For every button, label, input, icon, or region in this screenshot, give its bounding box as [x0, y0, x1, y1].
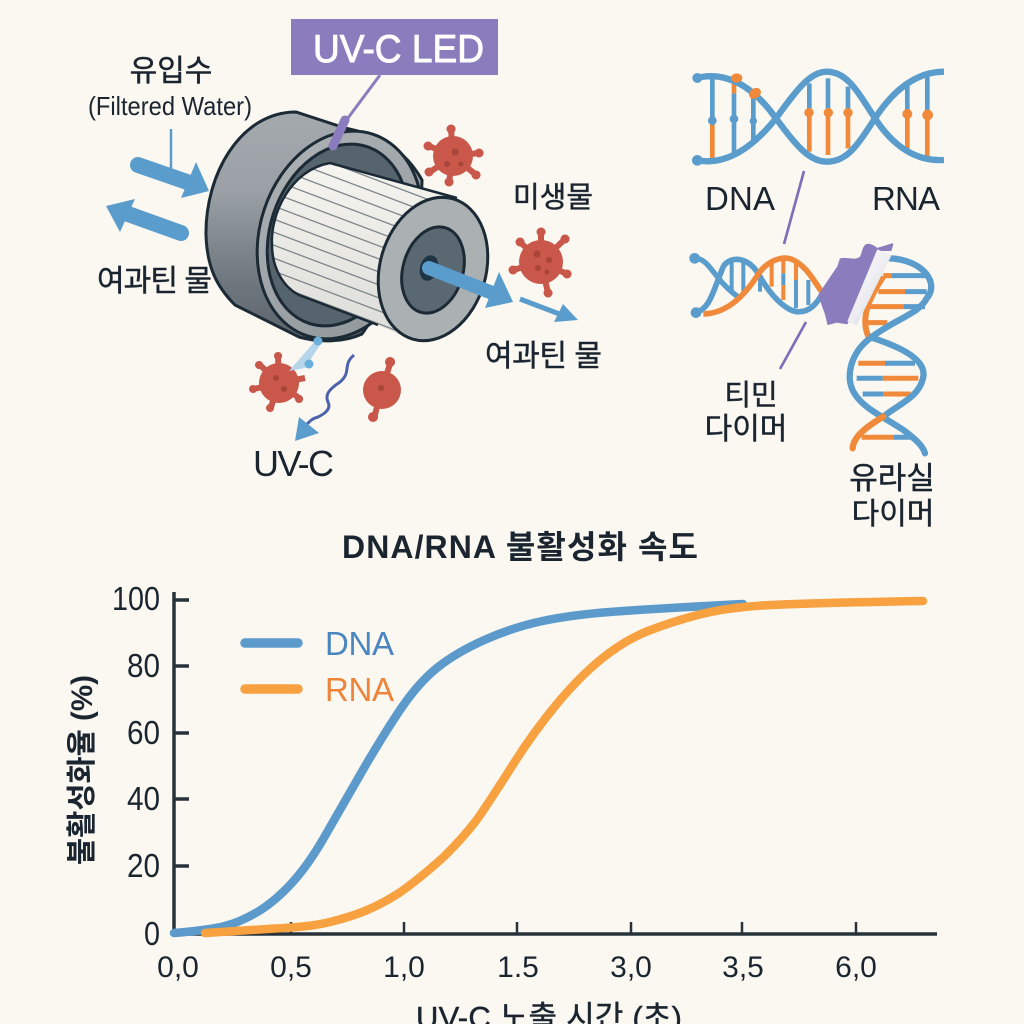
UV-C LED pointer [333, 75, 380, 146]
purple photolyase enzyme [819, 244, 892, 325]
label: filtered water right: 여과틴 물 [485, 340, 602, 373]
axes and ticks [174, 592, 937, 934]
legend [245, 625, 394, 708]
y axis numbers: 60 [127, 714, 160, 751]
virus inactivated [363, 362, 401, 417]
UV-C LED label: UV-C LED [313, 28, 484, 71]
line chart [66, 580, 937, 1024]
label: thymine dimer: 티민 [724, 379, 778, 412]
UV nozzle spray [289, 336, 322, 371]
RNA curve [205, 601, 923, 933]
label: thymine dimer second line: 다이머 [705, 413, 787, 446]
label: uracil dimer second line: 다이머 [852, 498, 934, 531]
panel: UV-C LED filter reactor [88, 19, 602, 484]
damaged helix right [850, 258, 931, 453]
y axis numbers: 40 [127, 780, 160, 817]
y axis numbers: 0 [144, 915, 160, 952]
legend: DNA [325, 625, 394, 662]
label: filtered water left: 여과틴 물 [97, 265, 212, 298]
label: filtered water: (Filtered Water) [88, 91, 252, 121]
x axis numbers: 0,5 [270, 951, 312, 984]
label: microbes: 미생물 [513, 182, 593, 214]
x axis numbers: 1.5 [497, 951, 539, 984]
DNA curve [174, 604, 743, 933]
label: UV-C: UV-C [253, 443, 334, 484]
y axis title: 불활성화율 (%) [66, 675, 99, 865]
x axis numbers: 3,0 [610, 951, 652, 984]
legend: RNA [325, 671, 394, 708]
y axis numbers [112, 580, 160, 952]
x axis numbers: 0,0 [157, 951, 199, 984]
chart title: DNA/RNA 불활성화 속도 [342, 529, 698, 565]
pointer line lower [780, 322, 806, 369]
damaged helix left [689, 253, 822, 318]
x axis numbers: 6,0 [835, 951, 877, 984]
y axis numbers: 80 [127, 647, 160, 684]
small outlet arrow [520, 299, 578, 322]
filter end cap [362, 184, 504, 354]
outlet arrow [429, 268, 513, 308]
virus bottom left [253, 356, 305, 408]
y axis numbers: 100 [112, 580, 160, 617]
panel: DNA and RNA damage [689, 72, 944, 531]
top helix [692, 72, 944, 166]
x axis numbers: 3,5 [722, 951, 764, 984]
inlet arrow [138, 129, 209, 198]
virus top [428, 129, 479, 182]
label: uracil: 유라실 [849, 461, 935, 496]
label: RNA: RNA [872, 180, 940, 217]
label: inflow: 유입수 [130, 55, 212, 88]
filter housing [206, 109, 449, 361]
x axis numbers: 1,0 [383, 951, 425, 984]
UV-C LED label [291, 19, 498, 75]
UV-C wave arrow [295, 355, 354, 441]
label: DNA: DNA [705, 180, 775, 217]
outflow arrow [106, 199, 181, 233]
filter cartridge [270, 162, 458, 342]
virus right [513, 232, 567, 293]
y axis numbers: 20 [127, 847, 160, 884]
x axis numbers [157, 951, 877, 984]
pointer line upper [784, 171, 804, 244]
